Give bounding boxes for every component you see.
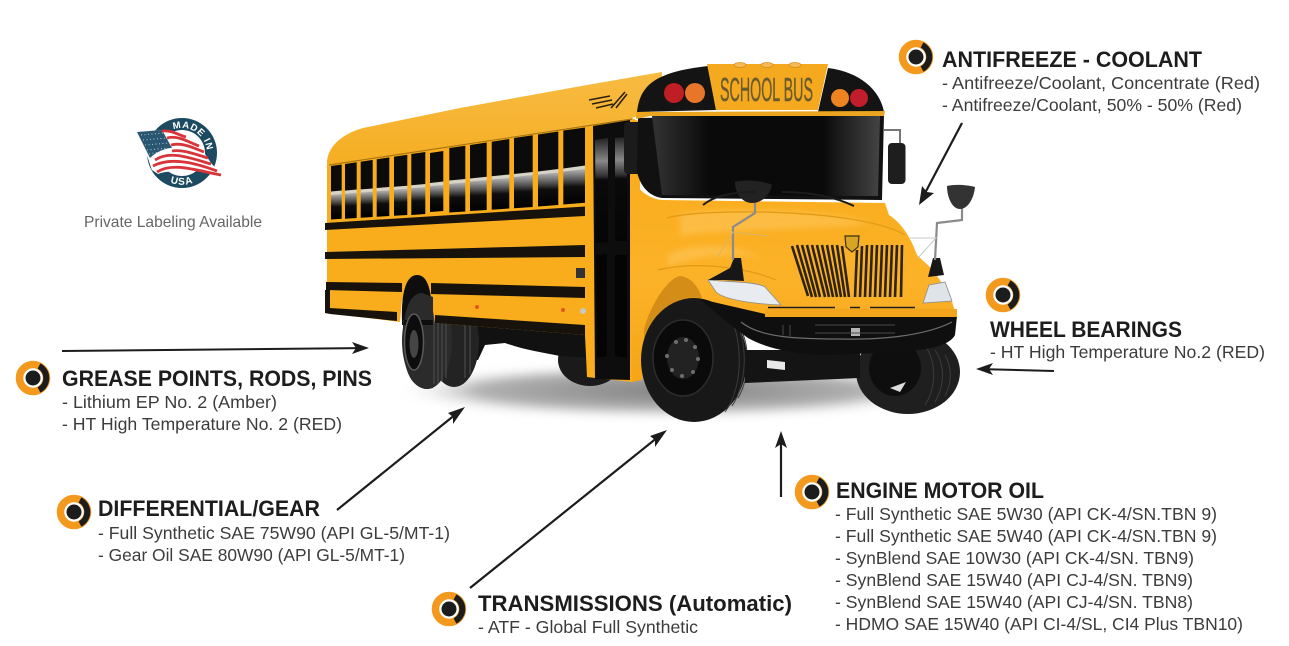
list: differential: - Full Synthetic SAE 75W90 (API GL-5/MT-1) [98,523,450,543]
badge text: made in: MADE IN [172,121,214,150]
list: differential: - Gear Oil SAE 80W90 (API GL-5/MT-1) [98,545,405,565]
list: transmissions: - ATF - Global Full Synthetic [478,617,698,637]
cab and hood [630,178,957,382]
list: engine oil: - Full Synthetic SAE 5W40 (API CK-4/SN.TBN 9) [835,526,1217,546]
list: engine oil [835,504,1243,634]
winged emblem [589,92,627,108]
sign clearance lights [734,62,801,68]
panel: antifreeze coolant [902,44,1260,115]
lower glass [331,169,585,220]
panel: engine motor oil [798,478,1243,634]
heading: antifreeze: ANTIFREEZE - COOLANT [942,47,1203,72]
list: wheel bearings: - HT High Temperature No.2 (RED) [990,342,1265,362]
school bus illustration [325,62,975,423]
arrow: to wheel bearings [976,363,1054,375]
list: engine oil: - SynBlend SAE 10W30 (API CK-4/SN. TBN9) [835,548,1194,568]
inner fender shadow [644,276,702,345]
door [593,120,630,380]
windshield [637,114,884,200]
hood highlights [668,210,870,266]
roof [327,72,662,165]
heading: transmissions: TRANSMISSIONS (Automatic) [478,591,792,616]
side markers [475,268,586,314]
ground shadow [392,369,952,423]
badge: made in USA [137,118,222,188]
rear wheel arch [402,275,433,325]
panel: transmissions [436,591,792,637]
icon: antifreeze [902,44,930,70]
black side stripes [325,206,585,335]
rear wheel front face [403,293,433,389]
side windows [331,128,585,220]
list: grease: - Lithium EP No. 2 (Amber) [62,392,277,412]
hood crease [658,212,905,280]
heading: grease: GREASE POINTS, RODS, PINS [62,366,372,391]
flag [137,130,222,175]
list: antifreeze: - Antifreeze/Coolant, 50% - 50% (Red) [942,95,1242,115]
list: antifreeze [942,73,1260,115]
sign panel [707,64,828,110]
icon: engine oil [798,478,826,506]
arrow: to antifreeze [919,123,962,205]
bus body side [327,118,640,382]
yellow visor strip [636,111,885,119]
panel: differential gear [60,496,450,565]
text: private labeling: Private Labeling Available [84,214,262,231]
wipers [703,192,854,206]
badge text: USA: USA [171,176,193,185]
rear dual wheels [402,293,479,389]
icon: transmissions [436,596,462,622]
panel: grease points [20,364,372,434]
grille slats [792,245,902,297]
icon: grease [20,364,46,392]
arrow: to grease points [62,342,369,354]
list: engine oil: - HDMO SAE 15W40 (API CI-4/SL, CI4 Plus TBN10) [835,614,1243,634]
front left wheel [641,298,747,422]
heading: wheel bearings: WHEEL BEARINGS [990,317,1182,342]
upper glass [331,128,585,192]
grille [789,236,908,298]
top cap with lights [589,62,885,119]
lights [664,83,868,107]
arrow: to transmission [470,430,667,588]
front bumper [700,299,957,355]
lower frame [745,350,860,383]
far side wheels [558,330,960,414]
list: antifreeze: - Antifreeze/Coolant, Concentrate (Red) [942,73,1260,93]
heading: engine oil: ENGINE MOTOR OIL [836,478,1044,503]
right fender mirror [910,185,975,277]
silver frames [331,164,585,196]
arrow: to differential [337,407,465,510]
icon: wheel bearings [990,282,1016,308]
list: grease: - HT High Temperature No. 2 (RED) [62,414,342,434]
right side mirror [884,130,906,184]
left headlight [708,280,781,305]
list: engine oil: - Full Synthetic SAE 5W30 (API CK-4/SN.TBN 9) [835,504,1217,524]
heading: differential: DIFFERENTIAL/GEAR [98,496,320,521]
chassis [432,318,592,360]
roof eave line [329,119,632,165]
arrow: to engine [775,431,787,497]
icon: differential [60,498,88,526]
list: engine oil: - SynBlend SAE 15W40 (API CJ-4/SN. TBN9) [835,570,1193,590]
top cap with lights: SCHOOL BUS [720,71,813,108]
emblem [845,236,859,252]
list: grease [62,392,342,434]
right headlight [923,282,952,303]
list: differential [98,523,450,565]
panel: wheel bearings [990,282,1265,362]
door mirror [624,122,646,174]
left fender mirror [708,181,772,281]
list: engine oil: - SynBlend SAE 15W40 (API CJ-4/SN. TBN8) [835,592,1193,612]
